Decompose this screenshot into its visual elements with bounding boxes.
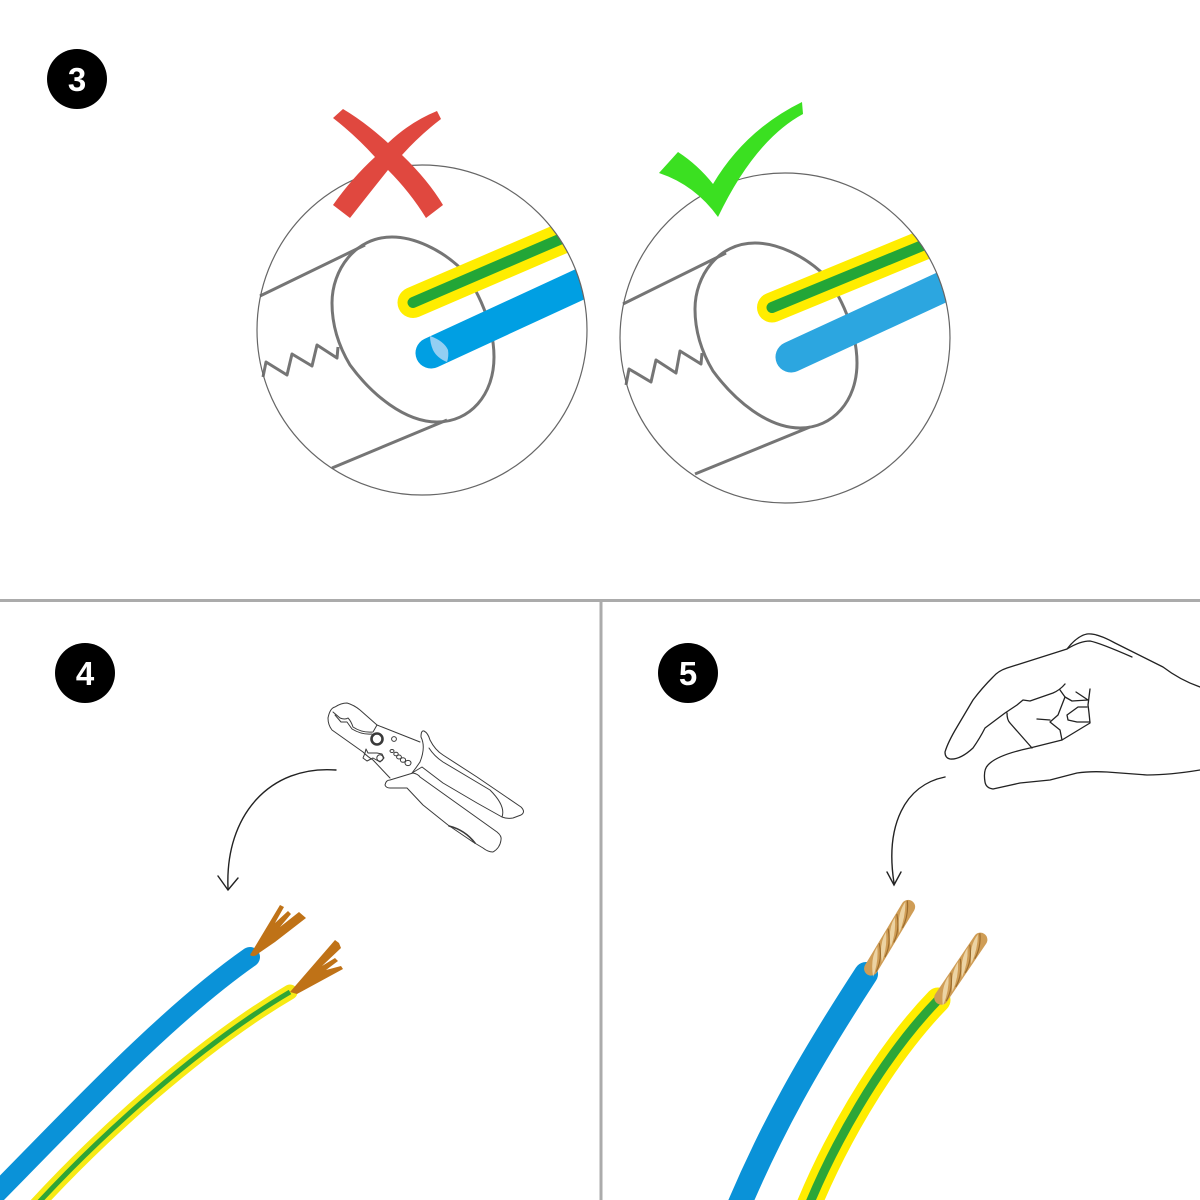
arrow: strippers to wires — [218, 770, 336, 890]
lens circle — [620, 173, 950, 503]
twisted copper — [932, 930, 990, 1007]
illustration: correct cable strip — [620, 102, 960, 503]
panel: step 4 — [0, 643, 524, 1200]
icon: red cross — [333, 109, 443, 218]
cable outline — [260, 237, 494, 468]
badge: number 4 — [55, 643, 115, 703]
blue insulation — [0, 957, 250, 1200]
badge: number 5: 5 — [679, 655, 697, 692]
yellow insulation — [803, 1000, 938, 1200]
blue wire with frayed strands — [0, 905, 306, 1200]
twisted copper — [861, 897, 918, 978]
blue wire — [791, 279, 960, 357]
blue wire with nick — [430, 275, 600, 362]
yellow insulation — [30, 992, 290, 1200]
badge: number 3 — [47, 49, 107, 109]
icon: green check — [659, 102, 803, 217]
lens circle — [257, 165, 587, 495]
copper strands — [250, 905, 306, 956]
badge: number 5 — [658, 643, 718, 703]
blue wire with twisted copper — [733, 897, 918, 1200]
copper strands — [290, 940, 343, 994]
cable outline — [623, 243, 857, 474]
icon: wire strippers — [328, 703, 524, 852]
illustration: wrong cable strip — [257, 109, 600, 495]
arrow: hand to wires — [887, 777, 945, 885]
earth wire with twisted copper — [803, 930, 990, 1200]
panel: step 5 — [658, 634, 1200, 1200]
earth wire — [772, 230, 960, 308]
earth wire — [413, 222, 600, 302]
blue insulation — [733, 974, 866, 1200]
earth wire with frayed strands — [30, 940, 343, 1200]
badge: number 3: 3 — [68, 61, 86, 98]
icon: hand twisting wire — [945, 634, 1200, 789]
panel: step 3 — [47, 49, 960, 503]
badge: number 4: 4 — [76, 655, 95, 692]
